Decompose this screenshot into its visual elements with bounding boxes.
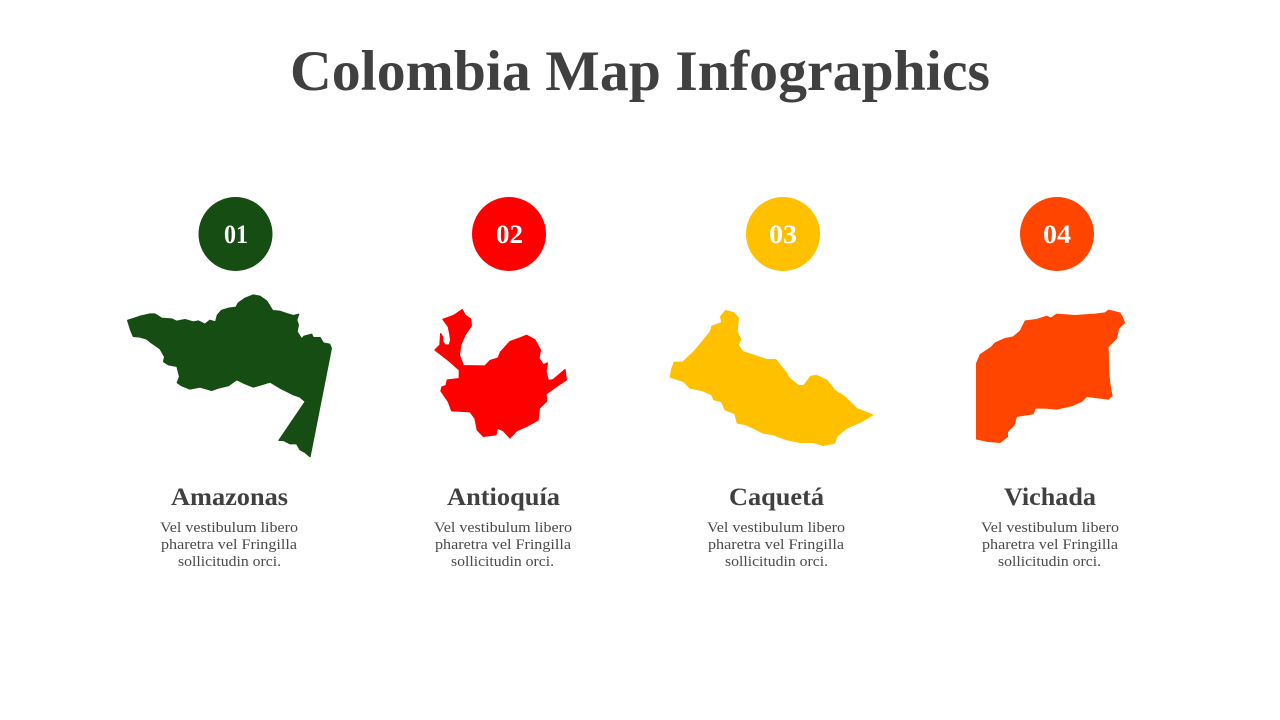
- title: Colombia Map Infographics: [290, 40, 990, 103]
- panel: Amazonas: [128, 197, 331, 570]
- heading: Amazonas: Amazonas: [171, 484, 288, 511]
- description: Antioquía: sollicitudin orci.: [451, 554, 554, 570]
- description: Amazonas: Vel vestibulum libero: [160, 520, 298, 536]
- description: Caquetá: sollicitudin orci.: [725, 554, 828, 570]
- number badge 02: 02: [496, 220, 523, 249]
- description: Amazonas: [160, 520, 298, 570]
- description: Antioquía: [434, 520, 572, 570]
- panel: Caquetá: [670, 197, 873, 570]
- map: Antioquía: [435, 310, 566, 438]
- description: Caquetá: pharetra vel Fringilla: [708, 537, 844, 553]
- description: Antioquía: Vel vestibulum libero: [434, 520, 572, 536]
- panel: Antioquía: [434, 197, 572, 570]
- description: Vichada: sollicitudin orci.: [998, 554, 1101, 570]
- number badge 01: 01: [224, 220, 248, 249]
- description: Vichada: [981, 520, 1119, 570]
- description: Caquetá: Vel vestibulum libero: [707, 520, 845, 536]
- map: Caquetá: [670, 311, 873, 445]
- number badge 03: 03: [769, 220, 797, 249]
- description: Vichada: pharetra vel Fringilla: [982, 537, 1118, 553]
- description: Antioquía: pharetra vel Fringilla: [435, 537, 571, 553]
- number badge 01: [198, 197, 272, 271]
- description: Vichada: Vel vestibulum libero: [981, 520, 1119, 536]
- number badge 02: [472, 197, 546, 271]
- number badge 04: [1020, 197, 1094, 271]
- description: Amazonas: pharetra vel Fringilla: [161, 537, 297, 553]
- heading: Antioquía: Antioquía: [447, 484, 561, 511]
- number badge 03: [746, 197, 820, 271]
- number badge 04: 04: [1043, 220, 1071, 249]
- map: Vichada: [977, 310, 1124, 442]
- heading: Vichada: Vichada: [1004, 484, 1097, 511]
- description: Caquetá: [707, 520, 845, 570]
- heading: Caquetá: Caquetá: [729, 484, 825, 511]
- panel: Vichada: [977, 197, 1124, 570]
- description: Amazonas: sollicitudin orci.: [178, 554, 281, 570]
- map: Amazonas: [128, 295, 331, 457]
